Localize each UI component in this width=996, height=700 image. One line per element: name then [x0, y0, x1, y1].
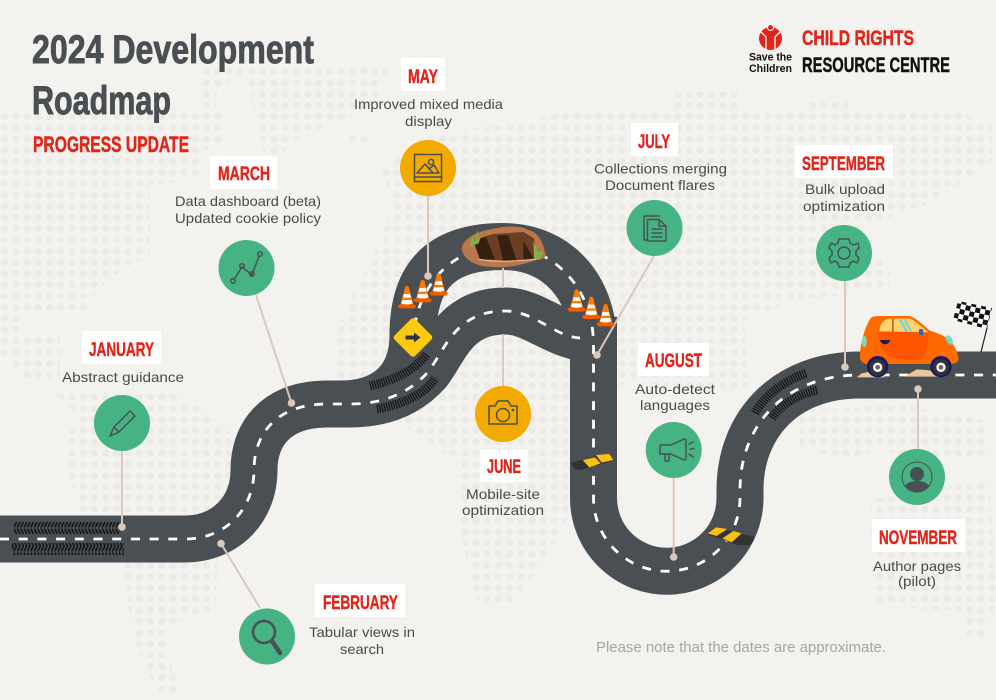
- August milestone: languages: [640, 397, 710, 413]
- August milestone: Auto-detect: [635, 381, 715, 397]
- January milestone: JANUARY: [89, 339, 154, 361]
- title: [32, 28, 314, 123]
- finish flag: [953, 301, 992, 352]
- March milestone: Updated cookie policy: [175, 210, 321, 226]
- January milestone: Abstract guidance: [62, 369, 184, 385]
- tire marks: [12, 354, 818, 555]
- September milestone: SEPTEMBER: [802, 153, 885, 175]
- May milestone: MAY: [408, 66, 438, 88]
- March milestone: MARCH: [218, 163, 270, 185]
- June milestone: optimization: [462, 502, 544, 518]
- July milestone: JULY: [638, 131, 670, 153]
- road sign: [392, 317, 434, 358]
- traffic cones: [398, 273, 615, 326]
- September milestone: [795, 145, 893, 281]
- speed bumps: [571, 454, 754, 545]
- November milestone: [872, 449, 965, 589]
- footnote: Please note that the dates are approximate.: [596, 640, 886, 656]
- May milestone: display: [405, 113, 452, 129]
- logo: Save the Children, Child Rights Resource Centre: Save the: [749, 52, 792, 64]
- February milestone: Tabular views in: [309, 624, 415, 640]
- August milestone: [635, 343, 715, 478]
- February milestone: [239, 584, 415, 664]
- March milestone: [175, 156, 321, 296]
- May milestone: Improved mixed media: [354, 96, 503, 112]
- June milestone: JUNE: [487, 456, 521, 478]
- November milestone: Author pages: [873, 558, 961, 574]
- June milestone: [462, 386, 544, 518]
- logo: Save the Children, Child Rights Resource Centre: [749, 24, 950, 77]
- July milestone: Collections merging: [594, 160, 727, 176]
- road: [0, 246, 996, 571]
- logo: Save the Children, Child Rights Resource Centre: Children: [749, 63, 792, 75]
- connector lines and pins: [118, 195, 922, 608]
- February milestone: search: [340, 641, 384, 657]
- logo: Save the Children, Child Rights Resource Centre: CHILD RIGHTS: [802, 27, 914, 50]
- August milestone: AUGUST: [645, 350, 702, 372]
- November milestone: (pilot): [898, 573, 936, 589]
- February milestone: FEBRUARY: [323, 592, 398, 614]
- July milestone: [594, 123, 727, 256]
- January milestone: [62, 331, 184, 451]
- title: 2024 Development: [32, 28, 314, 72]
- March milestone: Data dashboard (beta): [175, 193, 321, 209]
- car: [857, 316, 959, 377]
- subtitle: PROGRESS UPDATE: [33, 132, 189, 157]
- pothole: [462, 227, 546, 267]
- July milestone: Document flares: [605, 177, 715, 193]
- June milestone: Mobile-site: [466, 486, 540, 502]
- November milestone: NOVEMBER: [879, 527, 957, 549]
- September milestone: Bulk upload: [805, 181, 885, 197]
- September milestone: optimization: [803, 198, 885, 214]
- May milestone: [354, 58, 503, 196]
- title: Roadmap: [32, 79, 171, 123]
